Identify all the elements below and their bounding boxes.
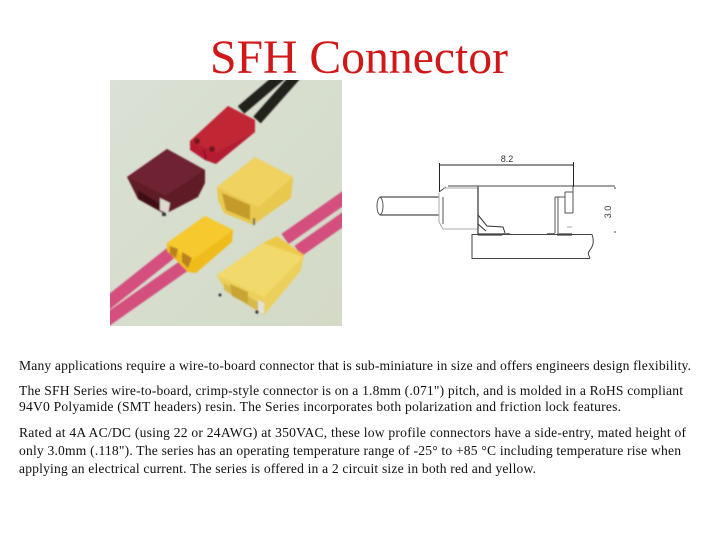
contact pads	[478, 233, 572, 236]
circuit board	[472, 234, 593, 258]
title: SFH Connector	[210, 31, 508, 84]
paragraph 2: 94V0 Polyamide (SMT headers) resin. The Series incorporates both polarization and friction lock features.	[19, 399, 621, 415]
dimension: 3.0	[448, 186, 615, 233]
technical drawing	[377, 154, 615, 258]
body text	[19, 358, 691, 476]
pink wires	[104, 195, 348, 322]
yellow plug	[167, 216, 233, 273]
dark maroon header	[127, 149, 205, 216]
paragraph 3: Rated at 4A AC/DC (using 22 or 24AWG) at 350VAC, these low profile connectors have a side-entry, mated height of	[19, 425, 686, 441]
connector housing	[439, 186, 573, 235]
yellow header	[217, 157, 293, 225]
dimension: 8.2: 8.2	[501, 154, 513, 164]
photo: connectors	[104, 76, 348, 326]
black wires	[241, 76, 296, 120]
paragraph 3: applying an electrical current. The series is offered in a 2 circuit size in both red and yellow.	[19, 461, 536, 476]
yellow mated connector	[217, 236, 304, 315]
dimension: 3.0: 3.0	[603, 206, 613, 218]
paragraph 1: Many applications require a wire-to-board connector that is sub-miniature in size and offers engineers design flexibility.	[19, 358, 691, 373]
paragraph 2	[19, 383, 683, 415]
paragraph 2: The SFH Series wire-to-board, crimp-style connector is on a 1.8mm (.071") pitch, and is molded in a RoHS compliant	[19, 383, 683, 399]
paragraph 3	[19, 425, 686, 476]
paragraph 3: only 3.0mm (.118"). The series has an operating temperature range of -25° to +85 °C including temperature rise when	[19, 443, 681, 459]
dimension: 8.2	[439, 154, 574, 192]
red connector	[190, 106, 255, 164]
wire	[377, 197, 439, 215]
